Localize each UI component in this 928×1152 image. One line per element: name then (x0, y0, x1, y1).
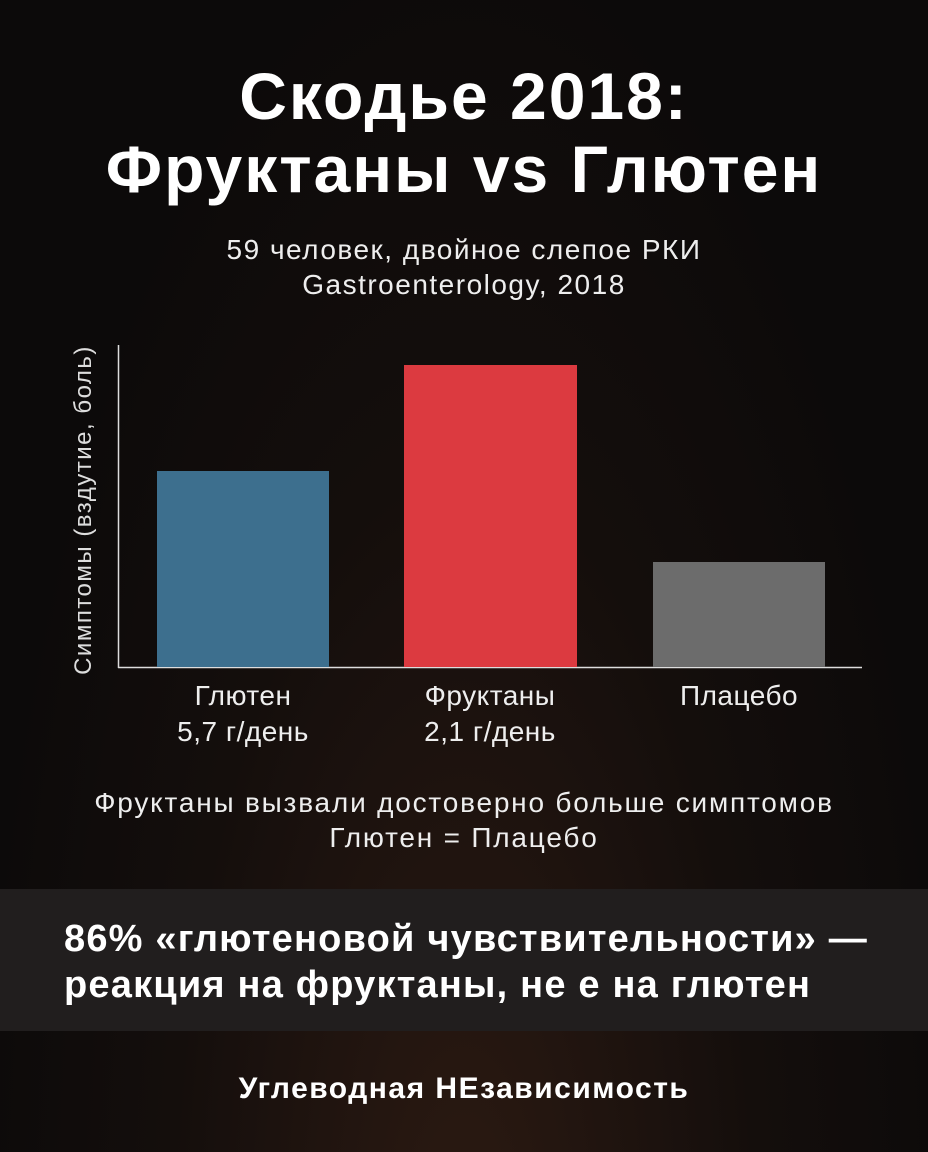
callout band: 86% «глютеновой чувствительности» — (64, 918, 868, 960)
callout band (0, 889, 928, 1031)
caption (94, 787, 834, 853)
y axis label: Симптомы (вздутие, боль) (70, 345, 97, 675)
bar: placebo (653, 562, 825, 667)
caption: Фруктаны вызвали достоверно больше симптомов (94, 787, 834, 818)
text: 2,1 г/день (424, 716, 556, 747)
callout band: реакция на фруктаны, не е на глютен (64, 964, 811, 1006)
bar chart (70, 345, 862, 675)
bar: fructans (404, 365, 577, 667)
subtitle (227, 234, 701, 300)
title: Фруктаны vs Глютен (106, 132, 822, 206)
subtitle: 59 человек, двойное слепое РКИ (227, 234, 701, 265)
footer: Углеводная НЕзависимость (239, 1072, 689, 1105)
subtitle: Gastroenterology, 2018 (302, 269, 626, 300)
text: Фруктаны (425, 680, 555, 711)
text: 5,7 г/день (177, 716, 309, 747)
title: Скодье 2018: (239, 59, 689, 133)
bar: gluten (157, 471, 329, 667)
text: Плацебо (680, 680, 798, 711)
text: Глютен (195, 680, 291, 711)
bar labels (177, 680, 798, 747)
caption: Глютен = Плацебо (329, 822, 599, 853)
title (106, 59, 822, 206)
